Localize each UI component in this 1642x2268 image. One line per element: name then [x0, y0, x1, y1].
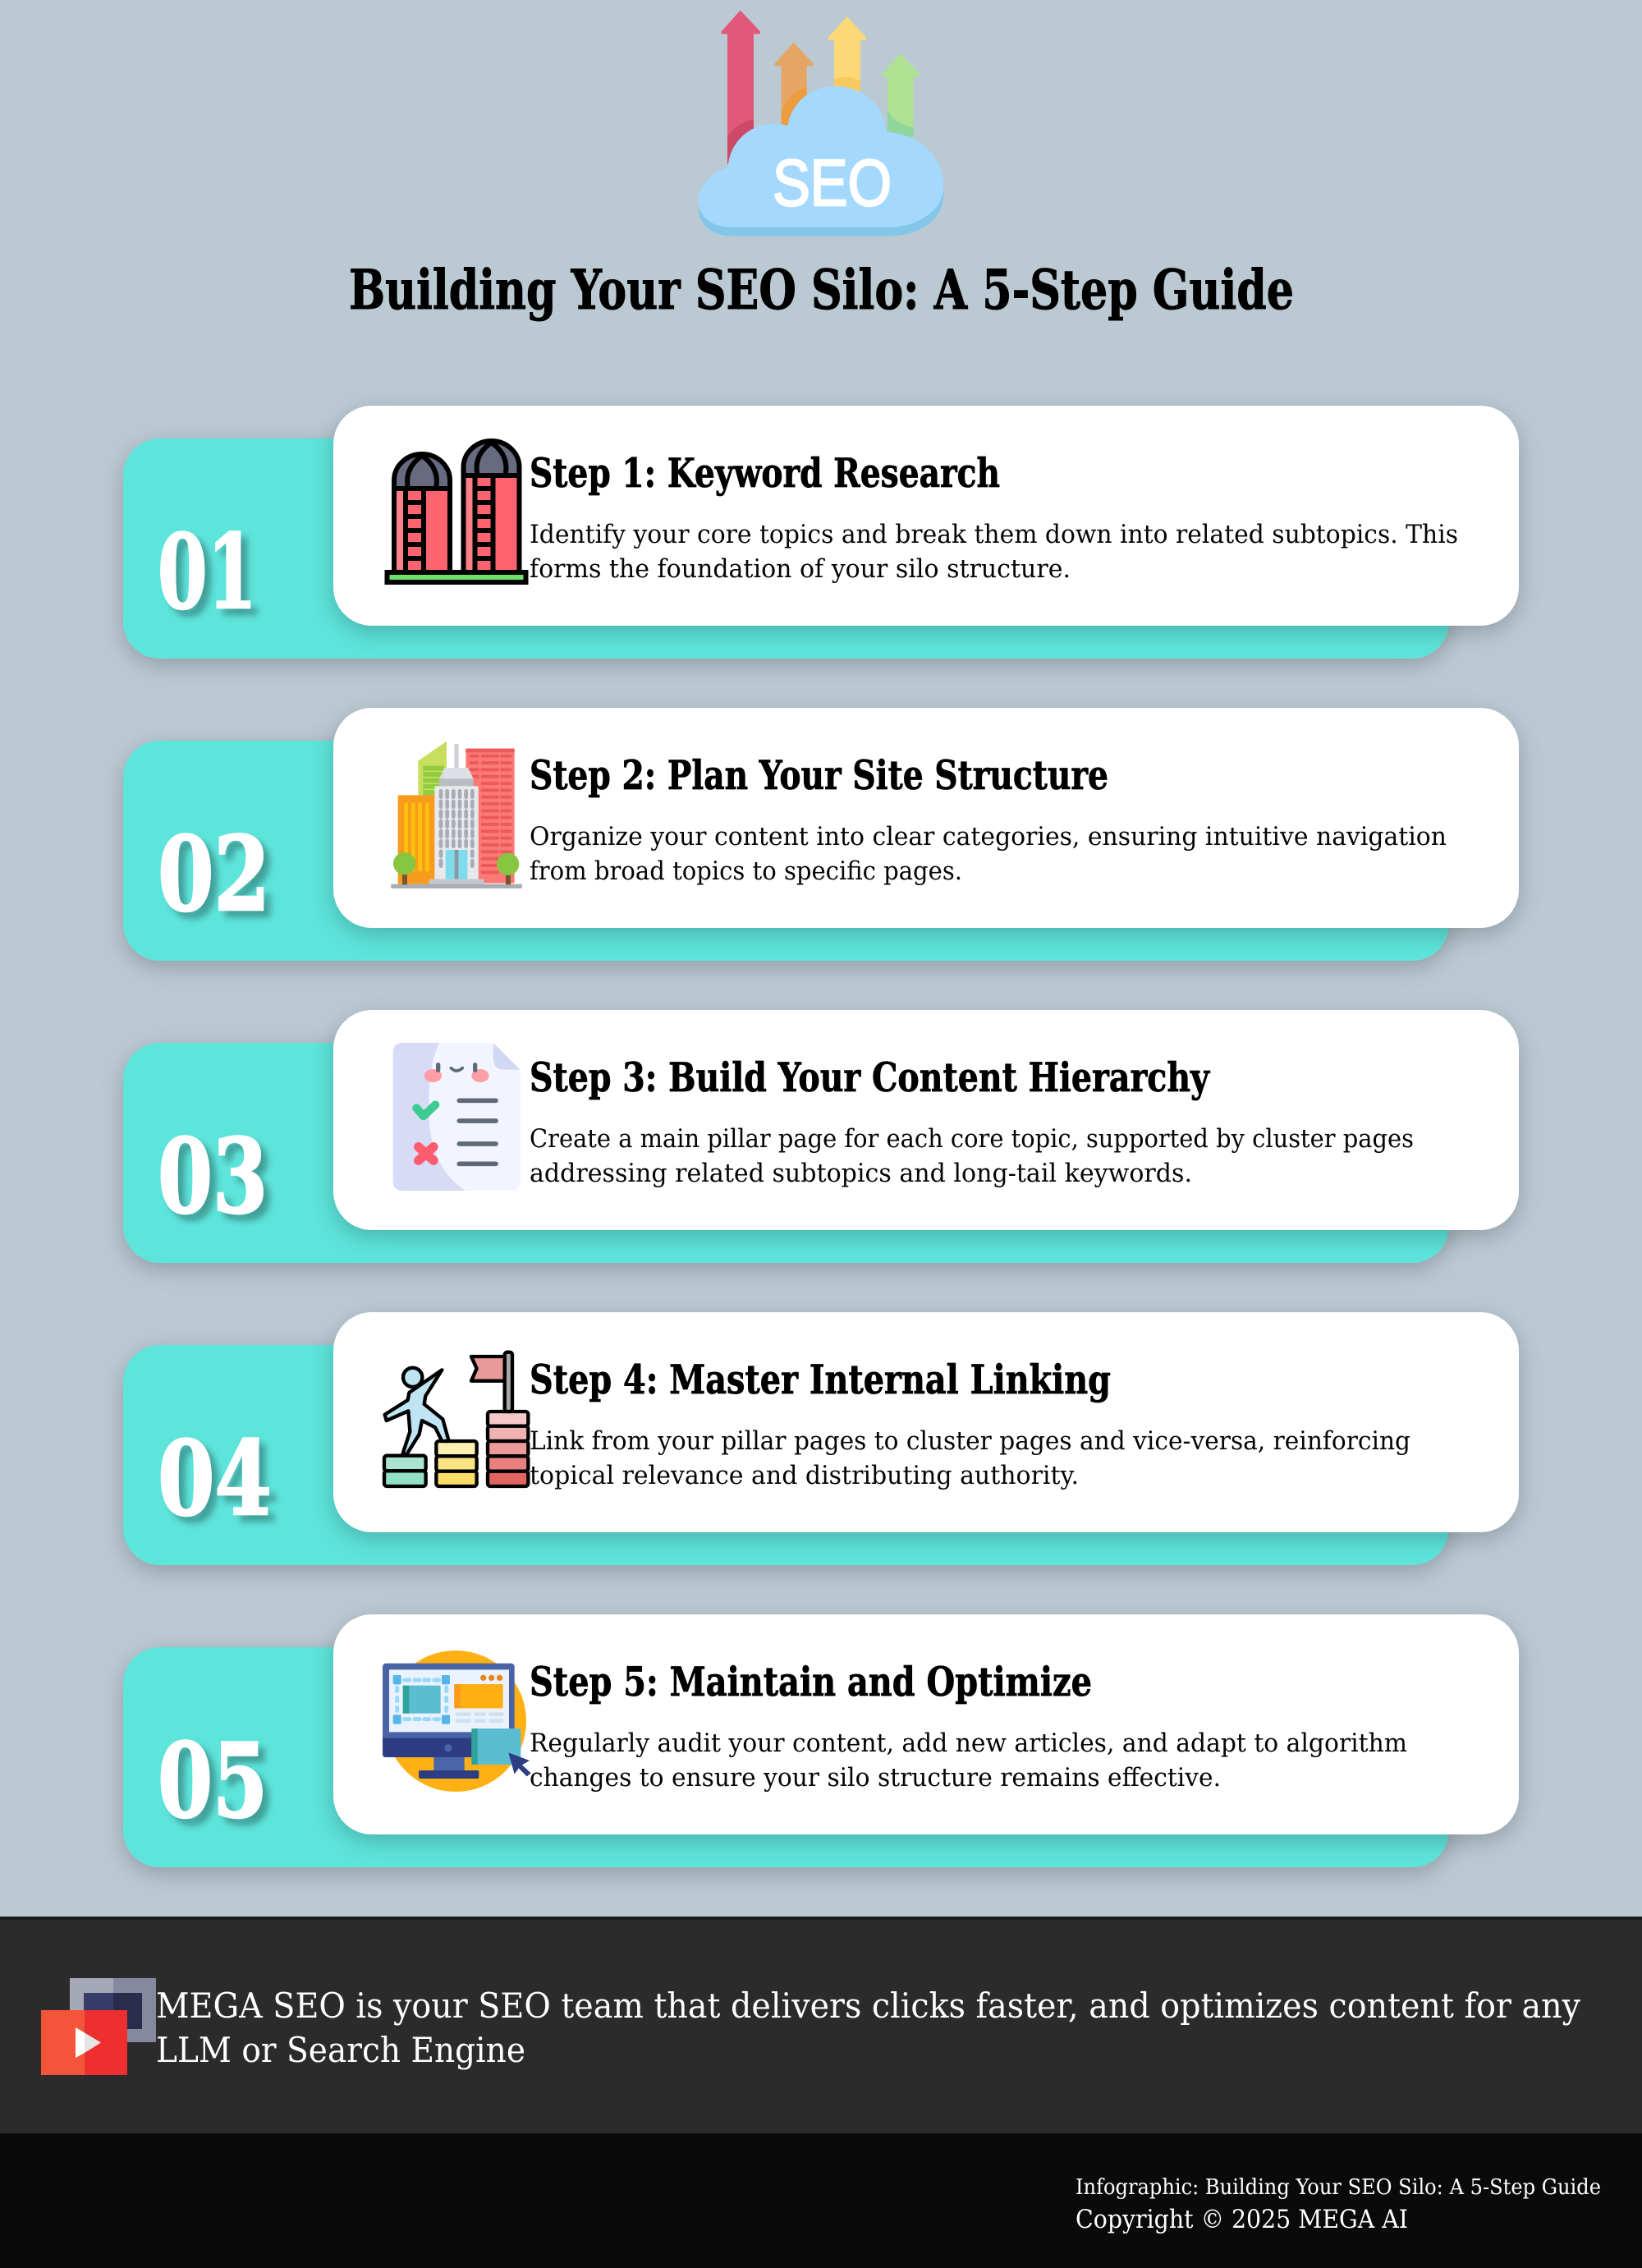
step 4 text [530, 1426, 1410, 1490]
teal number card 1 [123, 438, 1449, 659]
step 3 heading: Step 3: Build Your Content Hierarchy [530, 1054, 1210, 1101]
step 1 heading: Step 1: Keyword Research [530, 449, 1000, 497]
icon: web design monitor [383, 1650, 531, 1792]
step 1 text: Identify your core topics and break them down into related subtopics. This [530, 520, 1458, 549]
logo: play squares [41, 1978, 156, 2075]
step 1 text [530, 520, 1458, 584]
white content card 2 [333, 708, 1519, 928]
icon: checklist document [393, 1043, 520, 1191]
banner text: LLM or Search Engine [156, 2030, 525, 2070]
teal number card 2 [123, 741, 1449, 961]
teal number card 5 [123, 1647, 1449, 1867]
white content card 4 [333, 1312, 1519, 1532]
header icon: SEO cloud with arrows [699, 11, 943, 236]
step 4 text: topical relevance and distributing authority. [530, 1461, 1079, 1490]
icon: climbing steps to flag [384, 1352, 528, 1486]
white content card 3 [333, 1010, 1519, 1230]
number 02: 02 [158, 815, 270, 934]
step 4 heading: Step 4: Master Internal Linking [530, 1356, 1111, 1403]
step 5 text: Regularly audit your content, add new articles, and adapt to algorithm [530, 1729, 1407, 1758]
icon: city buildings [391, 741, 522, 888]
icon: grain silos [388, 441, 525, 582]
number 03: 03 [158, 1117, 268, 1237]
footer text: Copyright © 2025 MEGA AI [1076, 2205, 1408, 2234]
step 4 panel [123, 1312, 1519, 1565]
step 2 panel [123, 708, 1519, 961]
step 3 text [530, 1124, 1414, 1188]
step 2 text: Organize your content into clear categories, ensuring intuitive navigation [530, 822, 1447, 852]
number 05: 05 [158, 1721, 268, 1841]
footer text: Infographic: Building Your SEO Silo: A 5-Step Guide [1076, 2175, 1601, 2200]
step 5 panel [123, 1614, 1519, 1867]
white content card 5 [333, 1614, 1519, 1834]
step 3 text: addressing related subtopics and long-tail keywords. [530, 1159, 1192, 1188]
step 5 heading: Step 5: Maintain and Optimize [530, 1658, 1092, 1706]
footer text [1076, 2175, 1601, 2234]
step 2 text [530, 822, 1447, 886]
step 4 text: Link from your pillar pages to cluster pages and vice-versa, reinforcing [530, 1426, 1410, 1456]
step 5 text: changes to ensure your silo structure remains effective. [530, 1763, 1221, 1793]
copyright footer [0, 2133, 1642, 2268]
step 2 text: from broad topics to specific pages. [530, 856, 962, 886]
step 3 text: Create a main pillar page for each core topic, supported by cluster pages [530, 1124, 1414, 1154]
banner text: MEGA SEO is your SEO team that delivers clicks faster, and optimizes content for any [156, 1986, 1580, 2026]
number 04: 04 [158, 1419, 272, 1539]
step 1 panel [123, 406, 1519, 659]
step 3 panel [123, 1010, 1519, 1263]
step 2 heading: Step 2: Plan Your Site Structure [530, 751, 1108, 799]
cloud label: SEO [773, 146, 892, 219]
title: Building Your SEO Silo: A 5-Step Guide [349, 258, 1294, 322]
teal number card 3 [123, 1043, 1449, 1263]
step 1 text: forms the foundation of your silo structure. [530, 554, 1071, 584]
promo banner [0, 1917, 1642, 2133]
teal number card 4 [123, 1345, 1449, 1565]
number 01: 01 [158, 512, 257, 632]
step 5 text [530, 1729, 1407, 1793]
white content card 1 [333, 406, 1519, 626]
banner text [156, 1986, 1580, 2070]
